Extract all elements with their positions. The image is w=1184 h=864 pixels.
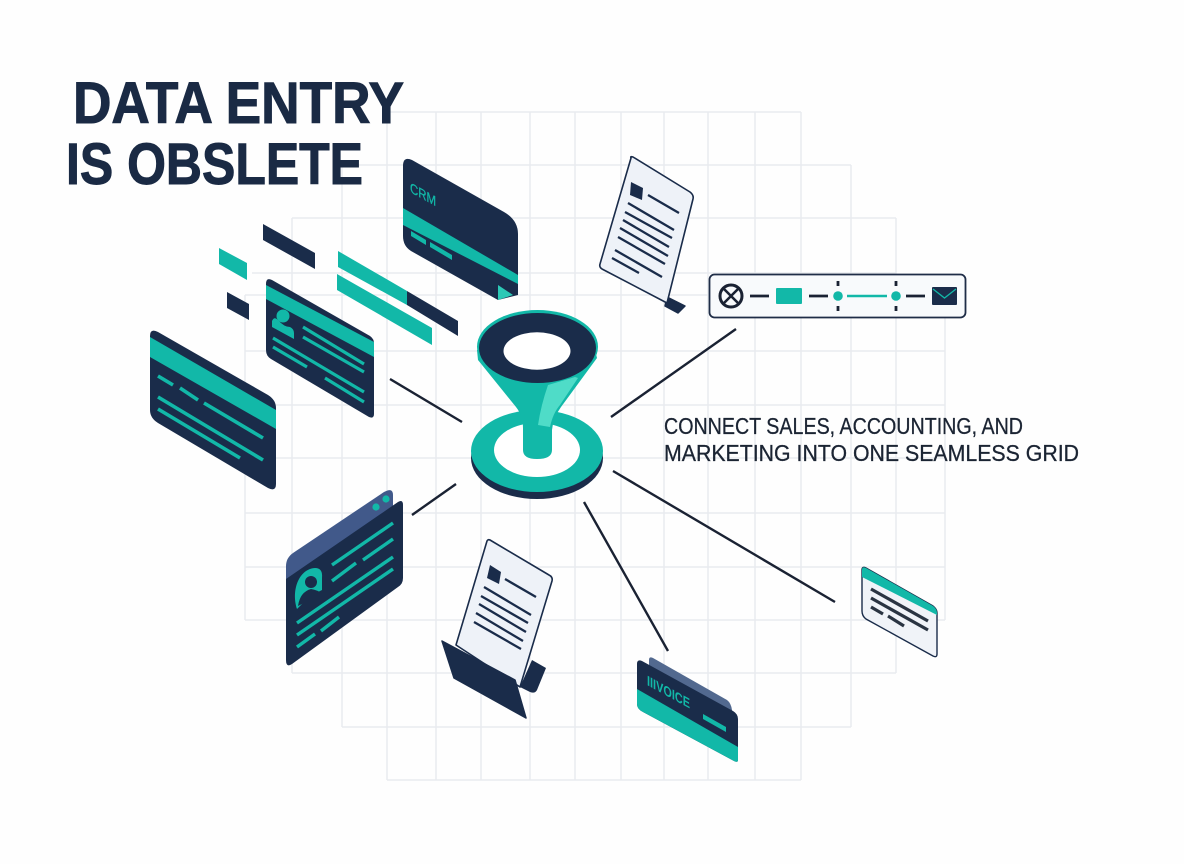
subtitle text: [664, 413, 1079, 466]
card: invoice: [637, 657, 738, 762]
funnel rim: [477, 310, 598, 383]
card: invoice: IIIVOICE: [647, 673, 690, 712]
funnel base: [471, 410, 603, 499]
card: CRM: [403, 159, 518, 300]
subtitle text: MARKETING INTO ONE SEAMLESS GRID: [664, 440, 1079, 466]
icon: avatar: [295, 568, 322, 609]
card: large data table: [150, 331, 276, 489]
title: [66, 71, 404, 197]
funnel: [471, 310, 603, 499]
title: IS OBSLETE: [66, 132, 363, 197]
funnel stem and cone: [477, 350, 597, 459]
card: profile: [266, 279, 374, 418]
icon: envelope: [932, 287, 957, 305]
document: top: [600, 157, 693, 313]
card: CRM: CRM: [410, 180, 436, 210]
data strips: [219, 224, 458, 345]
card: browser window: [286, 490, 403, 665]
icon: person: [272, 310, 294, 339]
icon: crossed circle: [720, 285, 742, 307]
connector lines: [390, 329, 835, 651]
subtitle text: CONNECT SALES, ACCOUNTING, AND: [664, 413, 1023, 439]
workflow pill: [710, 274, 966, 318]
title: DATA ENTRY: [73, 71, 404, 136]
document: bottom in tray: [442, 540, 552, 718]
card: small window: [862, 567, 937, 657]
